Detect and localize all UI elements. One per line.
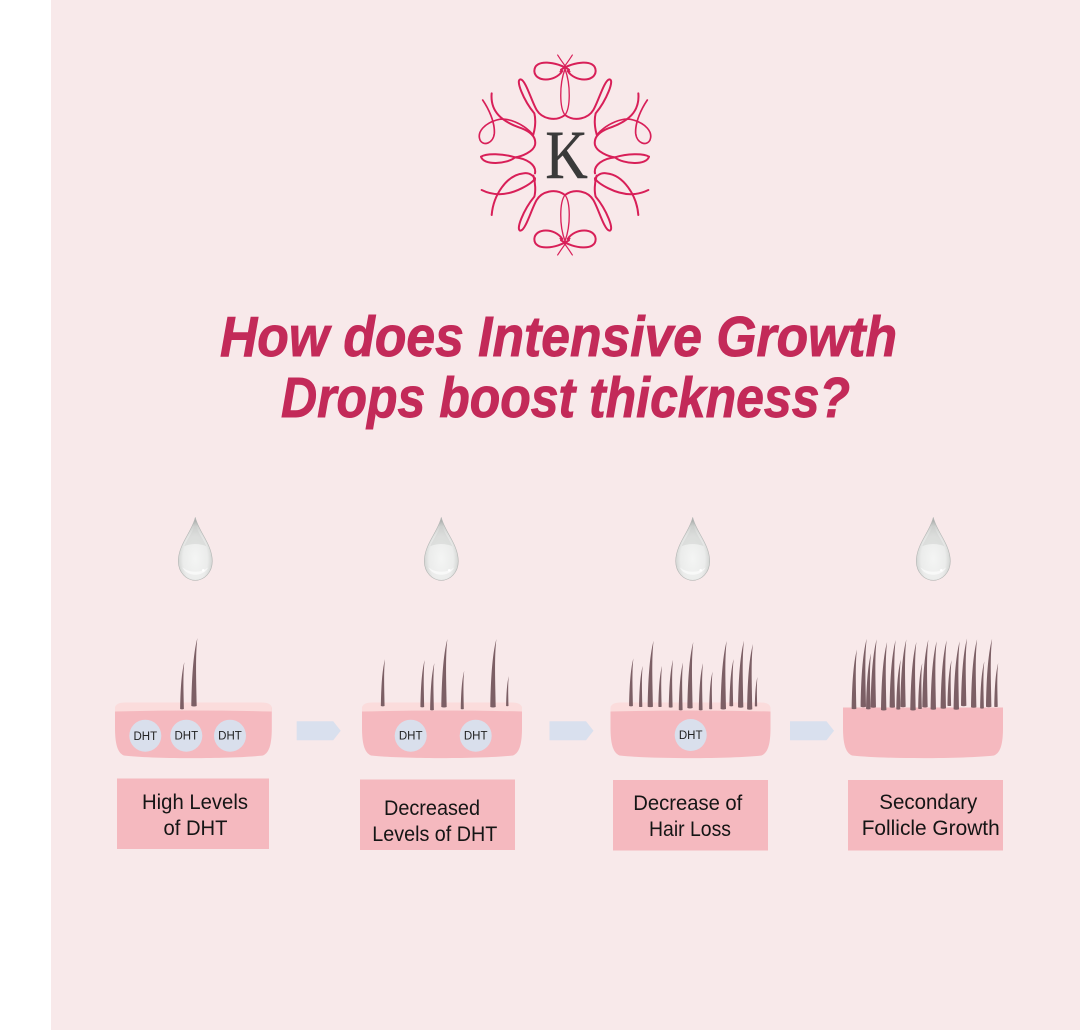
- label 2: Decreased: [384, 797, 480, 820]
- label 3: Decrease of: [633, 792, 742, 815]
- panel: step 1 high levels of DHT: [115, 517, 272, 849]
- label 1: [117, 778, 269, 849]
- label 4: [848, 780, 1003, 850]
- logo: [479, 55, 651, 255]
- hairs 1: [180, 638, 197, 709]
- DHT circles 1: DHT: [133, 731, 157, 743]
- DHT circles 2: [395, 720, 492, 752]
- DHT circles 1: [129, 720, 246, 752]
- DHT circles 1: DHT: [218, 730, 242, 742]
- title: How does Intensive Growth: [220, 305, 897, 369]
- arrow 2: [550, 721, 594, 740]
- DHT circle 3: [675, 719, 707, 751]
- DHT circles 1: DHT: [174, 730, 198, 742]
- icon: drop 4: [916, 517, 950, 580]
- title: Drops boost thickness?: [281, 366, 850, 430]
- label 2: [360, 780, 515, 850]
- label 2: Levels of DHT: [372, 823, 497, 846]
- arrow 1: [297, 721, 341, 740]
- title: [220, 305, 897, 430]
- DHT circles 2: DHT: [464, 730, 488, 742]
- arrow 3: [790, 721, 834, 740]
- panel: step 4 secondary follicle growth: [843, 517, 1003, 850]
- hairs 3: [629, 641, 757, 710]
- icon: drop 2: [424, 517, 458, 580]
- label 1: High Levels: [142, 791, 248, 814]
- label 4: Follicle Growth: [862, 817, 1000, 840]
- icon: drop 1: [178, 517, 212, 580]
- icon: drop 3: [676, 517, 710, 580]
- skin block 2: [362, 702, 522, 758]
- panel: step 2 decreased levels of DHT: [360, 517, 522, 850]
- logo ornament: [479, 55, 651, 255]
- label 3: Hair Loss: [649, 818, 731, 841]
- hairs 4: [852, 638, 998, 710]
- DHT circle 3: DHT: [679, 730, 703, 742]
- panel: step 3 decrease of hair loss: [610, 517, 770, 850]
- skin block 4: [843, 708, 1003, 758]
- label 1: of DHT: [164, 817, 228, 840]
- logo letter K: K: [545, 117, 588, 193]
- DHT circles 2: DHT: [399, 730, 423, 742]
- label 3: [613, 780, 768, 850]
- label 4: Secondary: [879, 791, 978, 814]
- skin block 3: [610, 702, 770, 758]
- hairs 2: [381, 639, 509, 710]
- skin block 1: [115, 702, 272, 758]
